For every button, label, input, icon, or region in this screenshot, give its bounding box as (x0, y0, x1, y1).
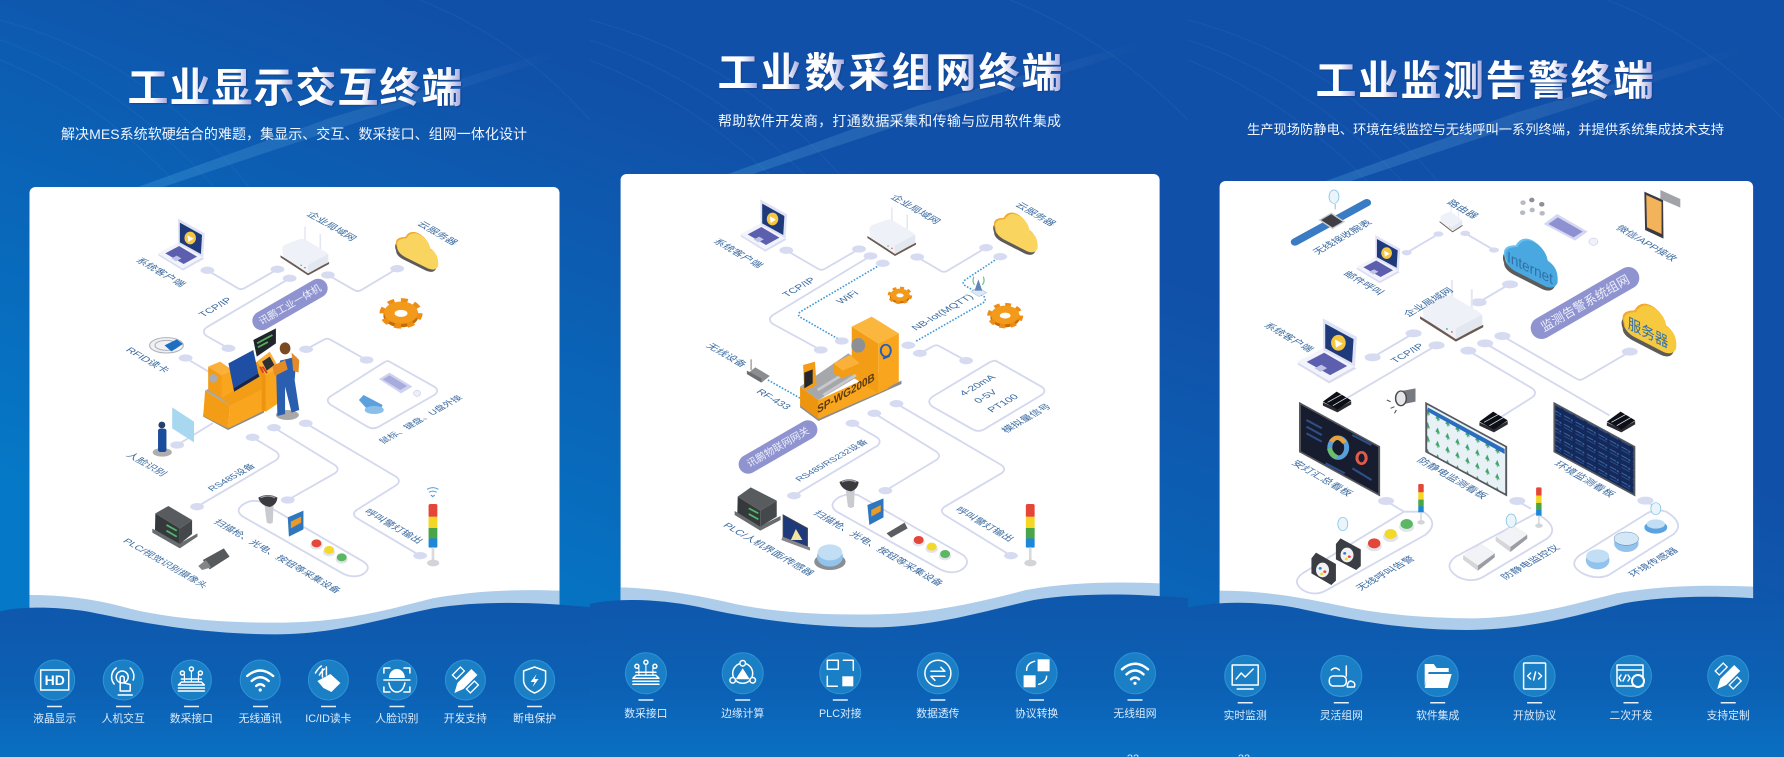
icon: laptop (740, 199, 787, 252)
panel: industrial data acquisition networking terminal (590, 0, 1190, 757)
icon: second stack light (1535, 487, 1543, 528)
icon: data interface (171, 660, 211, 700)
connector lines (1347, 231, 1638, 417)
label: 4-20mA (958, 373, 999, 398)
label: 路由器 (1444, 198, 1482, 221)
background light streak (138, 73, 485, 187)
icon: PLC (735, 487, 781, 531)
title: 网 (936, 50, 976, 96)
background curve lines (0, 40, 249, 187)
dark wave (0, 603, 591, 757)
feature labels: 二次开发 (1609, 708, 1653, 722)
bottom half of diagram (590, 400, 1190, 757)
connector lines (787, 400, 1018, 572)
feature labels (33, 711, 556, 725)
label: 无线设备 (703, 341, 750, 369)
feature labels: 无线通讯 (239, 711, 282, 725)
label: PLC/视觉识别摄像头 (120, 536, 212, 590)
icon: cloud server (993, 212, 1038, 255)
icon: buttons (310, 539, 348, 564)
icon: camera (887, 523, 908, 538)
icon: customization (1708, 656, 1749, 696)
icon: phone (1644, 190, 1680, 239)
feature labels: 数采接口 (170, 711, 213, 725)
icon: buttons (913, 536, 951, 560)
label: 呼叫警灯输出 (952, 505, 1017, 543)
icon: flexible networking (1321, 656, 1362, 696)
label: TCP/IP (197, 296, 235, 319)
title: 端 (422, 65, 462, 111)
label: RFID读卡 (123, 345, 173, 375)
title: 工 (128, 65, 168, 111)
label: WiFi (835, 290, 862, 306)
label: 扫描枪、光电、按钮等采集设备 (211, 517, 345, 595)
feature labels: 支持定制 (1707, 708, 1750, 722)
feature labels: 断电保护 (513, 711, 556, 725)
icon: face recognition (153, 407, 194, 457)
icon: scanner (839, 479, 859, 508)
icon: LCD display: HD (45, 672, 65, 688)
panel: industrial display terminal (0, 0, 591, 757)
feature labels: 灵活组网 (1320, 708, 1363, 722)
subtitle: 生产现场防静电、环境在线监控与无线呼叫一系列终端，并提供系统集成技术支持 (1247, 122, 1724, 137)
icon: router (867, 207, 916, 256)
label: 鼠标、键盘、U盘外接 (376, 393, 465, 445)
diagram labels (1261, 198, 1681, 592)
connector lines (179, 265, 437, 428)
feature labels: 软件集成 (1416, 708, 1459, 722)
background curve lines (590, 0, 1188, 175)
icon: cloud server (395, 232, 438, 272)
label: 模拟量信号 (998, 402, 1054, 435)
icon: laptop (158, 218, 205, 271)
top half of diagram (1295, 190, 1680, 432)
white diagram card (1220, 181, 1753, 631)
label: 环境传感器 (1625, 546, 1681, 579)
icon: wireless networking (1114, 653, 1156, 694)
icon: horn (1387, 388, 1416, 413)
label: RF-433 (753, 388, 793, 412)
icon: photoelectric sensor (867, 498, 883, 525)
feature labels (1224, 708, 1750, 722)
machine: SP-WG200B (800, 317, 901, 421)
screen: andon dashboard (1300, 403, 1379, 495)
icon: protocol conversion (1016, 653, 1057, 694)
title: 端 (1613, 58, 1654, 104)
icon: wireless call tiles (1311, 517, 1361, 585)
label: 人脸识别 (123, 450, 170, 478)
label: 无线接收腕表 (1310, 218, 1375, 256)
label: TCP/IP (1389, 342, 1427, 365)
panel: industrial monitoring and alarm terminal (1184, 0, 1784, 757)
panel background (590, 0, 1188, 757)
label: 安灯汇总看板 (1289, 458, 1356, 498)
icon: gear (382, 300, 420, 327)
label: 无线呼叫告警 (1353, 554, 1418, 592)
label: 企业局域网 (1400, 286, 1456, 319)
feature labels (624, 706, 1157, 720)
feature labels: 开放协议 (1513, 708, 1556, 722)
icon: real-time monitoring (1225, 656, 1266, 696)
purple pill: monitoring network: 监测告警系统组网 (1538, 272, 1632, 334)
label: 系统客户端 (133, 256, 189, 289)
icon: small gear (889, 288, 911, 303)
light wave band (1220, 586, 1753, 647)
title: 终 (1570, 58, 1612, 104)
feature dashes (1238, 702, 1736, 704)
icon: large gear (989, 305, 1021, 327)
icon: small router (1440, 205, 1463, 232)
light wave band (621, 582, 1159, 647)
feature labels: 协议转换 (1015, 706, 1058, 720)
label: 云服务器 (1012, 200, 1059, 228)
title: 终 (978, 50, 1020, 96)
icon: open protocol (1514, 656, 1555, 696)
label: NB-Iot(MQTT) (910, 293, 976, 332)
white diagram card (30, 187, 560, 627)
feature labels: 无线组网 (1113, 706, 1157, 720)
label: 企业局域网 (304, 210, 360, 243)
feature labels: 人脸识别 (375, 711, 418, 725)
machine model name: SP-WG200B (817, 371, 875, 417)
subtitle: 解决MES系统软硬结合的难题，集显示、交互、数采接口、组网一体化设计 (61, 126, 527, 142)
feature labels: 数据透传 (916, 706, 960, 720)
icon: buttons (1367, 519, 1414, 551)
white diagram card (621, 174, 1160, 624)
connector lines (768, 244, 1044, 431)
title: 监 (1400, 58, 1442, 104)
light wave band (29, 590, 560, 634)
icon: keyboard and keys (1520, 198, 1598, 245)
title: 交 (296, 65, 336, 111)
icon: human-machine interaction (103, 660, 143, 700)
icon: secondary development (1610, 656, 1652, 696)
label: 防静电监测看板 (1414, 456, 1491, 501)
label: 微信/APP接收 (1613, 223, 1681, 263)
label: PLC/人机界面/传感器 (720, 521, 817, 578)
icon: wireless (240, 660, 280, 700)
label: 企业局域网 (888, 193, 944, 226)
icon: IC/ID card (308, 660, 348, 700)
label: 防静电监控仪 (1498, 543, 1563, 581)
feature icons row (1225, 656, 1749, 696)
purple pill: product name (735, 417, 821, 477)
title: 端 (1022, 50, 1062, 96)
icon: PLC docking (820, 653, 861, 694)
icon: anti-static monitors (1463, 514, 1527, 571)
title: 组 (892, 50, 932, 96)
icon: scanner (258, 495, 277, 524)
feature icons row (625, 653, 1156, 694)
icon: RFID card (150, 338, 183, 353)
subtitle: 帮助软件开发商，打通数据采集和传输与应用软件集成 (718, 113, 1061, 129)
screen: environment dashboard (1554, 403, 1634, 495)
dark wave (1184, 597, 1784, 757)
title (129, 66, 462, 108)
mini PC boxes (1323, 392, 1635, 432)
icon: face recognition (377, 660, 417, 700)
icon: HMI screen (781, 515, 810, 551)
icon: enterprise router (1420, 280, 1483, 342)
icon: NB-IoT tower (971, 277, 987, 297)
icon: server cloud (1622, 304, 1676, 356)
feature labels: PLC对接 (819, 706, 862, 720)
icon: small stack light (1417, 484, 1425, 525)
icon: photoelectric sensor (288, 511, 303, 537)
feature labels: 数采接口 (624, 706, 667, 720)
icon: data passthrough (917, 653, 958, 694)
feature dashes (47, 706, 542, 708)
icon: smart watch (1295, 190, 1367, 242)
label: 呼叫警灯输出 (361, 507, 426, 545)
label: 环境监测看板 (1551, 459, 1619, 499)
title: 工 (1316, 58, 1356, 104)
icon: sensor disc (814, 544, 846, 570)
panel background (1188, 0, 1784, 757)
icon: power-off protection (515, 660, 555, 700)
purple pill: product name: 讯鹏工业一体机 (256, 281, 324, 328)
icon: data interface (625, 653, 666, 694)
purple pill: monitoring network (1527, 263, 1643, 343)
title: 业 (1358, 58, 1399, 104)
purple pill: product name: 讯鹏物联网网关 (744, 424, 812, 470)
title: 工 (718, 50, 758, 96)
icon: software integration (1417, 656, 1458, 696)
icon: wireless device (747, 359, 770, 383)
feature labels: 边缘计算 (721, 706, 764, 720)
label: PT100 (986, 393, 1022, 414)
label: TCP/IP (781, 276, 819, 299)
label: 系统客户端 (710, 237, 766, 270)
feature labels: IC/ID读卡 (305, 711, 352, 725)
label: 邮件呼叫 (1340, 269, 1387, 297)
title: 业 (760, 50, 802, 96)
feature icons row (35, 660, 555, 700)
icon: environment sensors (1586, 503, 1667, 569)
icon: camera (198, 548, 230, 570)
icon: Internet cloud (1503, 239, 1558, 291)
screen: anti-static dashboard (1426, 403, 1506, 495)
title: 测 (1443, 58, 1484, 104)
icon: edge computing (722, 653, 763, 694)
feature labels: 人机交互 (102, 711, 145, 725)
dark wave (590, 595, 1190, 757)
icon: small laptop (1356, 235, 1400, 283)
feature labels: 开发支持 (444, 711, 487, 725)
title: 数 (804, 50, 846, 96)
label: RS485设备 (205, 461, 259, 493)
top half of diagram (740, 199, 1044, 431)
machine: industrial all-in-one (203, 328, 299, 430)
title: 示 (254, 65, 294, 111)
icon: PLC (152, 506, 197, 548)
title: 业 (170, 65, 210, 111)
icon: stack light (1024, 504, 1037, 566)
connector loops (1297, 497, 1678, 594)
connector lines (170, 420, 427, 576)
diagram labels (120, 210, 465, 595)
background light streak (725, 28, 1188, 175)
title: 采 (848, 50, 890, 96)
feature dashes (638, 699, 1142, 701)
Internet cloud text: Internet (1507, 249, 1554, 289)
title: 显 (212, 65, 252, 111)
label: RS485/RS232设备 (792, 437, 870, 483)
feature labels: 液晶显示 (33, 711, 76, 725)
label: 0-5V (972, 388, 1000, 405)
top half of diagram (150, 218, 438, 430)
title (1316, 58, 1654, 104)
icon: development support (445, 660, 485, 700)
title: 告 (1486, 58, 1526, 104)
icon: router (280, 227, 329, 275)
bottom half of diagram (0, 407, 591, 757)
icon: system laptop (1297, 318, 1357, 383)
background light streak (1323, 34, 1784, 182)
title: 互 (338, 65, 378, 111)
background curve lines (1188, 0, 1784, 182)
label: 扫描枪、光电、按钮等采集设备 (811, 508, 947, 588)
diagram labels (703, 193, 1059, 588)
server cloud text: 服务器 (1628, 315, 1668, 352)
title (718, 50, 1062, 96)
feature labels: 实时监测 (1224, 708, 1267, 722)
bottom half of diagram (1184, 403, 1784, 757)
icon: stack light with wifi (427, 488, 439, 566)
icon: LCD display (35, 660, 75, 700)
icon: keyboard and USB stick (359, 373, 421, 414)
label: 系统客户端 (1261, 321, 1317, 354)
title: 警 (1528, 58, 1569, 104)
panel background (0, 0, 590, 612)
title: 终 (380, 65, 420, 111)
label: 云服务器 (414, 219, 461, 247)
